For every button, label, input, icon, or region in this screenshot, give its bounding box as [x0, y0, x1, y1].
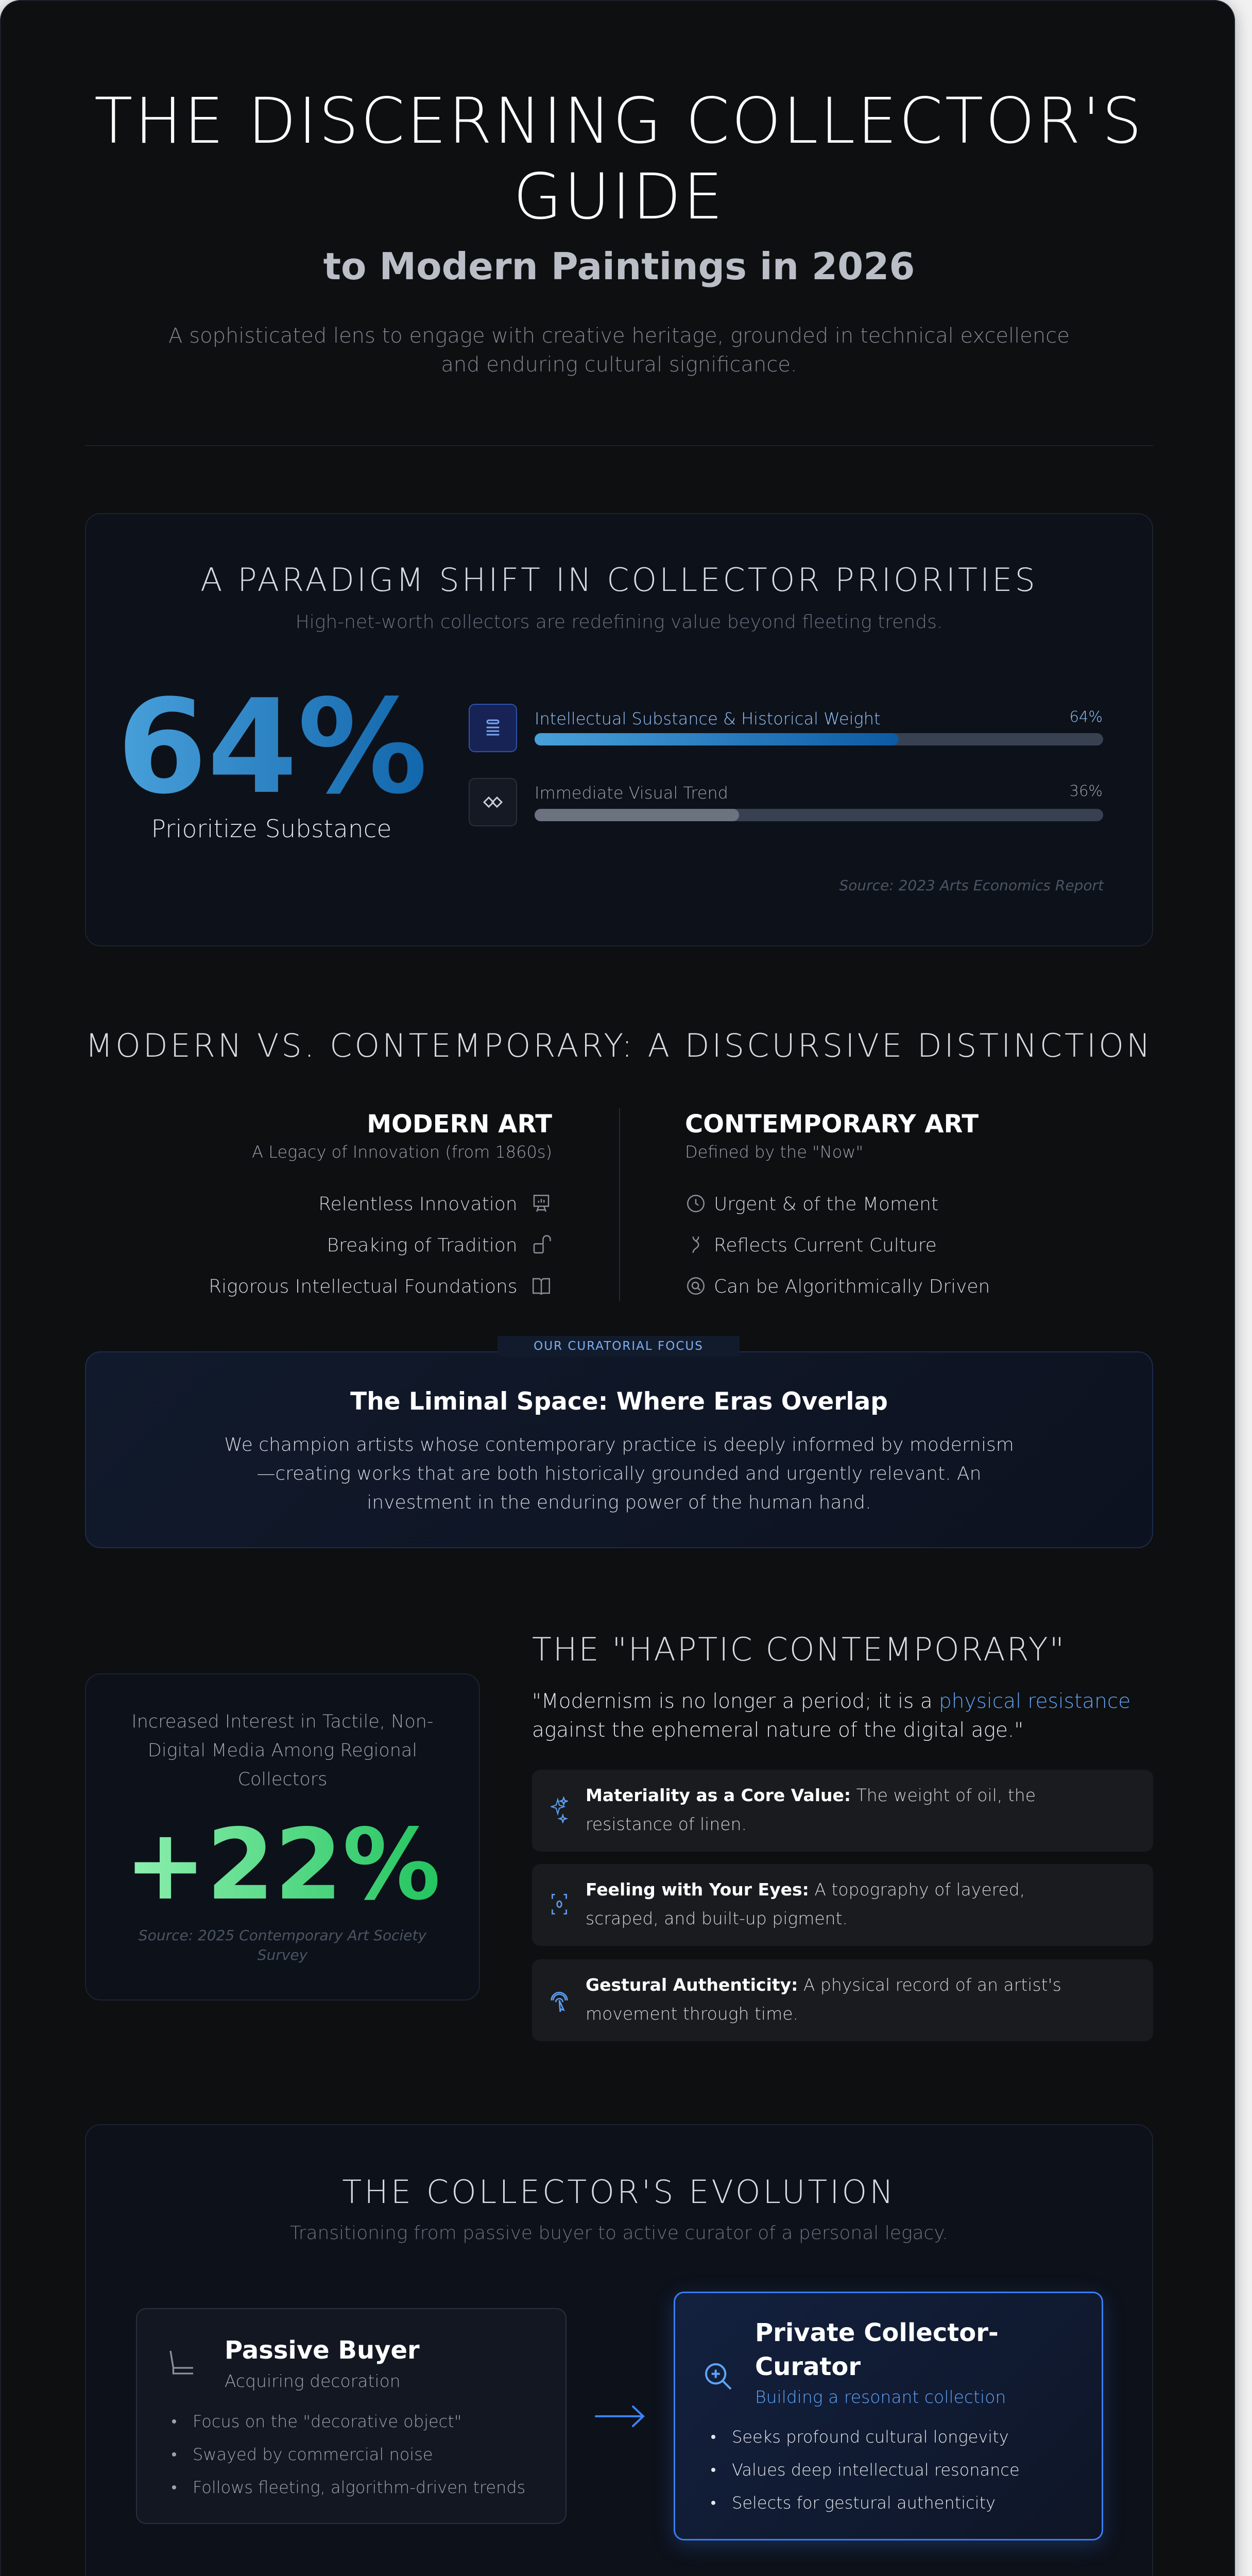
- contemporary art column: Reflects Current Culture: [714, 1235, 937, 1256]
- feature: gestural: [532, 1959, 1153, 2041]
- quote: "Modernism is no longer a period; it is a physical resistance: [532, 1690, 1130, 1713]
- curator box: Values deep intellectual resonance: [732, 2460, 1020, 2480]
- modern art column: [209, 1110, 552, 1297]
- contemporary art column: CONTEMPORARY ART: [685, 1110, 979, 1139]
- passive buyer box: Swayed by commercial noise: [193, 2445, 433, 2464]
- contemporary art column: [685, 1110, 990, 1297]
- panel: liminal space: [85, 1351, 1153, 1548]
- feature: feeling: scraped, and built-up pigment.: [586, 1908, 848, 1928]
- arrow: [595, 2405, 645, 2428]
- intro text: and enduring cultural significance.: [441, 353, 797, 377]
- title: [94, 84, 1144, 233]
- contemporary art column: Defined by the "Now": [685, 1142, 863, 1162]
- passive buyer box: Passive Buyer: [225, 2336, 420, 2365]
- feature: materiality: [532, 1770, 1153, 1852]
- subtitle: to Modern Paintings in 2026: [323, 245, 915, 288]
- curator box: [674, 2292, 1103, 2540]
- intro text: A sophisticated lens to engage with creative heritage, grounded in technical excellence: [168, 324, 1070, 348]
- body text: investment in the enduring power of the human hand.: [367, 1492, 871, 1513]
- curator box: Selects for gestural authenticity: [732, 2493, 996, 2513]
- column divider: [619, 1108, 620, 1301]
- stat card: +22%: Digital Media Among Regional: [148, 1740, 417, 1761]
- list items with icons: Relentless Innovation: [318, 1194, 518, 1215]
- stat card: +22%: Increased Interest in Tactile, Non-: [131, 1711, 434, 1732]
- title: THE DISCERNING COLLECTOR'S: [94, 84, 1144, 158]
- list items with icons: [209, 1194, 551, 1297]
- subheading: High-net-worth collectors are redefining value beyond fleeting trends.: [296, 612, 942, 633]
- section heading: modern vs contemporary: MODERN VS. CONTEMPORARY: A DISCURSIVE DISTINCTION: [85, 1027, 1153, 1064]
- feature: gestural: movement through time.: [586, 2004, 798, 2024]
- feature: feeling: Feeling with Your Eyes: A topography of layered,: [586, 1879, 1025, 1900]
- quote: against the ephemeral nature of the digital age.": [532, 1719, 1023, 1742]
- modern art column: MODERN ART: [367, 1110, 552, 1139]
- list items with icons: Rigorous Intellectual Foundations: [209, 1276, 518, 1297]
- bar row 1: [469, 704, 1103, 752]
- heading: The Liminal Space: Where Eras Overlap: [350, 1387, 888, 1416]
- body text: [224, 1434, 1014, 1513]
- heading: haptic contemporary: THE "HAPTIC CONTEMPORARY": [532, 1631, 1066, 1668]
- passive buyer box: Focus on the "decorative object": [193, 2412, 461, 2431]
- stat card: +22%: [85, 1673, 480, 2001]
- bar row 2: 36%: [1070, 782, 1103, 800]
- curator box: Private Collector-: [755, 2318, 999, 2347]
- title: GUIDE: [513, 160, 725, 233]
- bar row 2: [469, 778, 1103, 826]
- quote: [532, 1690, 1130, 1742]
- panel: paradigm shift: [85, 513, 1153, 946]
- big stat 64%: 64%: [117, 672, 427, 823]
- intro text: [168, 324, 1070, 377]
- passive buyer box: Follows fleeting, algorithm-driven trends: [193, 2478, 525, 2497]
- heading: A PARADIGM SHIFT IN COLLECTOR PRIORITIES: [200, 561, 1038, 599]
- contemporary art column: Urgent & of the Moment: [714, 1194, 938, 1215]
- curator box: Curator: [755, 2352, 861, 2381]
- icon: infinity: [469, 778, 517, 826]
- icon: magnifier plus: [705, 2363, 731, 2389]
- feature: materiality: resistance of linen.: [586, 1814, 747, 1834]
- curator box: Building a resonant collection: [755, 2387, 1006, 2407]
- tag: curatorial focus: [498, 1336, 740, 1357]
- contemporary art column: Can be Algorithmically Driven: [714, 1276, 990, 1297]
- passive buyer box: Acquiring decoration: [225, 2371, 401, 2391]
- big stat 64%: Prioritize Substance: [151, 815, 391, 843]
- stat card: +22%: Survey: [258, 1946, 307, 1963]
- feature: materiality: Materiality as a Core Value: The weight of oil, the: [586, 1785, 1036, 1805]
- bar row 1: Intellectual Substance & Historical Weight: [535, 709, 881, 728]
- icon: chair: [169, 2350, 193, 2375]
- icon: stack: [469, 704, 517, 752]
- feature: gestural: Gestural Authenticity: A physical record of an artist's: [586, 1975, 1061, 1995]
- source: Source: 2023 Arts Economics Report: [839, 877, 1104, 894]
- big stat: +22%: [125, 1808, 440, 1922]
- panel: collector's evolution: Transitioning from passive buyer to active curator of a personal legacy.: [290, 2223, 948, 2244]
- heading: THE COLLECTOR'S EVOLUTION: [342, 2173, 896, 2211]
- curator box: Seeks profound cultural longevity: [732, 2427, 1009, 2447]
- feature: feeling: [532, 1864, 1153, 1946]
- modern art column: A Legacy of Innovation (from 1860s): [252, 1142, 552, 1162]
- list items with icons: Breaking of Tradition: [327, 1235, 518, 1256]
- bar row 2: Immediate Visual Trend: [535, 783, 728, 803]
- body text: —creating works that are both historically grounded and urgently relevant. An: [256, 1463, 982, 1484]
- passive buyer box: [136, 2308, 567, 2524]
- body text: We champion artists whose contemporary practice is deeply informed by modernism: [224, 1434, 1014, 1455]
- bar row 1: 64%: [1070, 708, 1103, 725]
- stat card: +22%: Source: 2025 Contemporary Art Society: [139, 1927, 426, 1944]
- panel: collector's evolution: [85, 2124, 1153, 2576]
- tag: curatorial focus: OUR CURATORIAL FOCUS: [534, 1340, 704, 1353]
- stat card: +22%: Collectors: [238, 1769, 327, 1790]
